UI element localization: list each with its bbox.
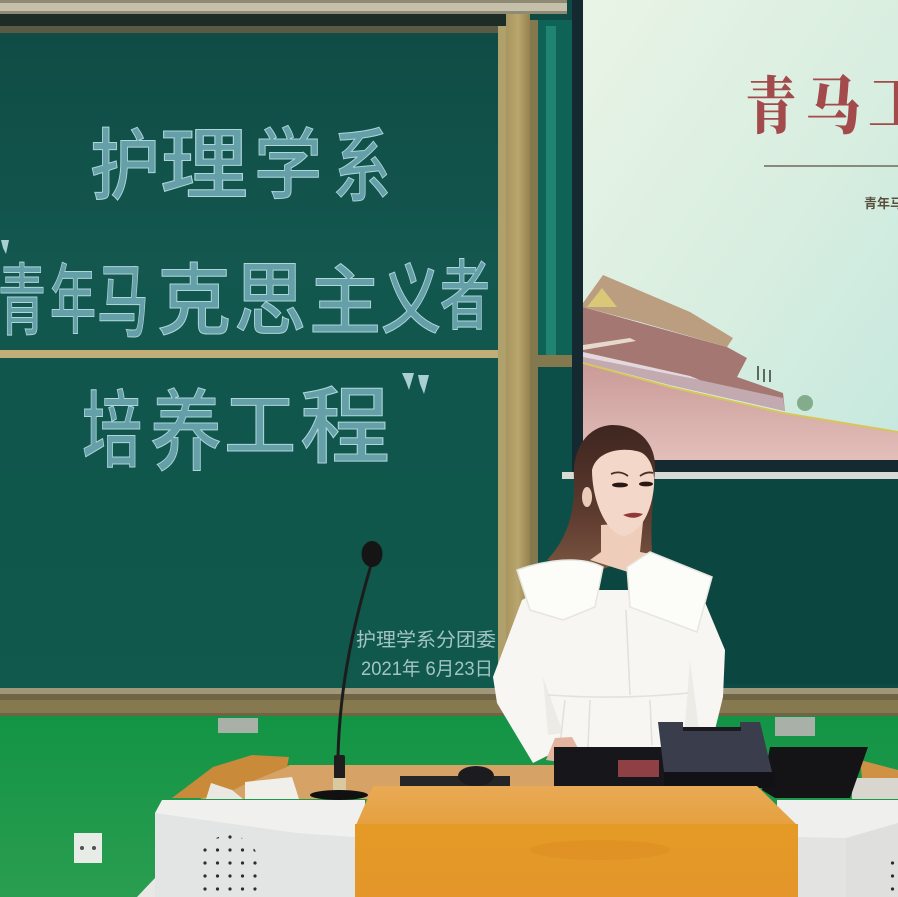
microphone — [310, 541, 382, 800]
chalk opening quote — [1, 240, 9, 254]
chalk heading: department: 系 — [333, 123, 391, 212]
mouth — [623, 513, 643, 518]
right armrest — [860, 760, 898, 795]
screen tray — [562, 472, 898, 479]
woman presenter — [493, 425, 725, 763]
slide: title — [746, 70, 898, 142]
podium top — [172, 755, 898, 799]
papers — [245, 777, 299, 799]
slide: rule — [764, 165, 898, 167]
chalk heading: programme title line 1: 义 — [381, 259, 441, 344]
blouse body — [493, 590, 725, 763]
eyebrows — [611, 472, 653, 476]
chalk signature — [356, 629, 496, 680]
chalk heading: programme title line 2: 程 — [300, 380, 390, 474]
chalk heading: programme title line 1: 思 — [234, 256, 306, 345]
wall sockets — [74, 717, 815, 863]
chalk heading: department: 学 — [254, 121, 322, 209]
waist seam — [548, 610, 688, 747]
left device — [554, 747, 664, 786]
left armrest — [172, 755, 289, 798]
chalk heading: programme title line 1: 年 — [50, 259, 96, 344]
chalk heading: programme title line 1: 主 — [309, 260, 381, 345]
collar — [517, 552, 712, 632]
chalk heading: programme title line 1: 者 — [440, 255, 490, 340]
lower chalkboard frame — [0, 688, 898, 716]
chalk heading: department: 理 — [160, 121, 248, 209]
chalk signature: 护理学系分团委 — [356, 629, 496, 651]
neck — [590, 522, 651, 572]
hair — [547, 425, 655, 570]
chalk signature: 2021年 6月23日 — [361, 658, 493, 680]
blouse shading — [543, 660, 700, 738]
lectern: wooden centre panel — [355, 786, 798, 897]
chalk heading: programme title line 1 — [0, 255, 490, 347]
slide: ground band — [583, 363, 898, 460]
projector screen — [572, 0, 898, 472]
chalk heading: programme title line 1: 克 — [157, 257, 231, 345]
lectern: white side panels — [137, 800, 898, 897]
slide: ground edge line — [583, 363, 898, 432]
mouse tray — [400, 776, 510, 786]
rear screen — [762, 747, 868, 798]
hand — [546, 737, 578, 762]
right chalkboard strip and lower board — [531, 20, 898, 684]
chalk heading: programme title line 2 — [82, 380, 390, 482]
chalk heading: programme title line 1: 青 — [0, 257, 46, 345]
green wall — [0, 716, 898, 897]
slate bracket — [658, 722, 772, 772]
slide: title: 青 — [746, 74, 796, 142]
chalk heading: programme title line 2: 培 — [82, 384, 142, 478]
chalkboard: left — [0, 0, 567, 690]
chalk heading: programme title line 2: 养 — [150, 383, 222, 482]
slide: title: 马 — [806, 73, 860, 142]
red label — [618, 760, 659, 777]
eyes — [612, 483, 628, 487]
chalk heading: department: 护 — [90, 122, 160, 210]
desk monitor — [554, 722, 868, 798]
chalk heading: programme title line 2: 工 — [224, 387, 296, 465]
chalk heading: department — [90, 121, 391, 212]
ear — [582, 487, 592, 507]
face — [592, 450, 654, 536]
bracket bar — [683, 727, 741, 731]
slide: Tiananmen gate — [583, 275, 813, 411]
chalk closing quote — [402, 373, 429, 394]
chalk heading: programme title line 1: 马 — [97, 258, 149, 347]
